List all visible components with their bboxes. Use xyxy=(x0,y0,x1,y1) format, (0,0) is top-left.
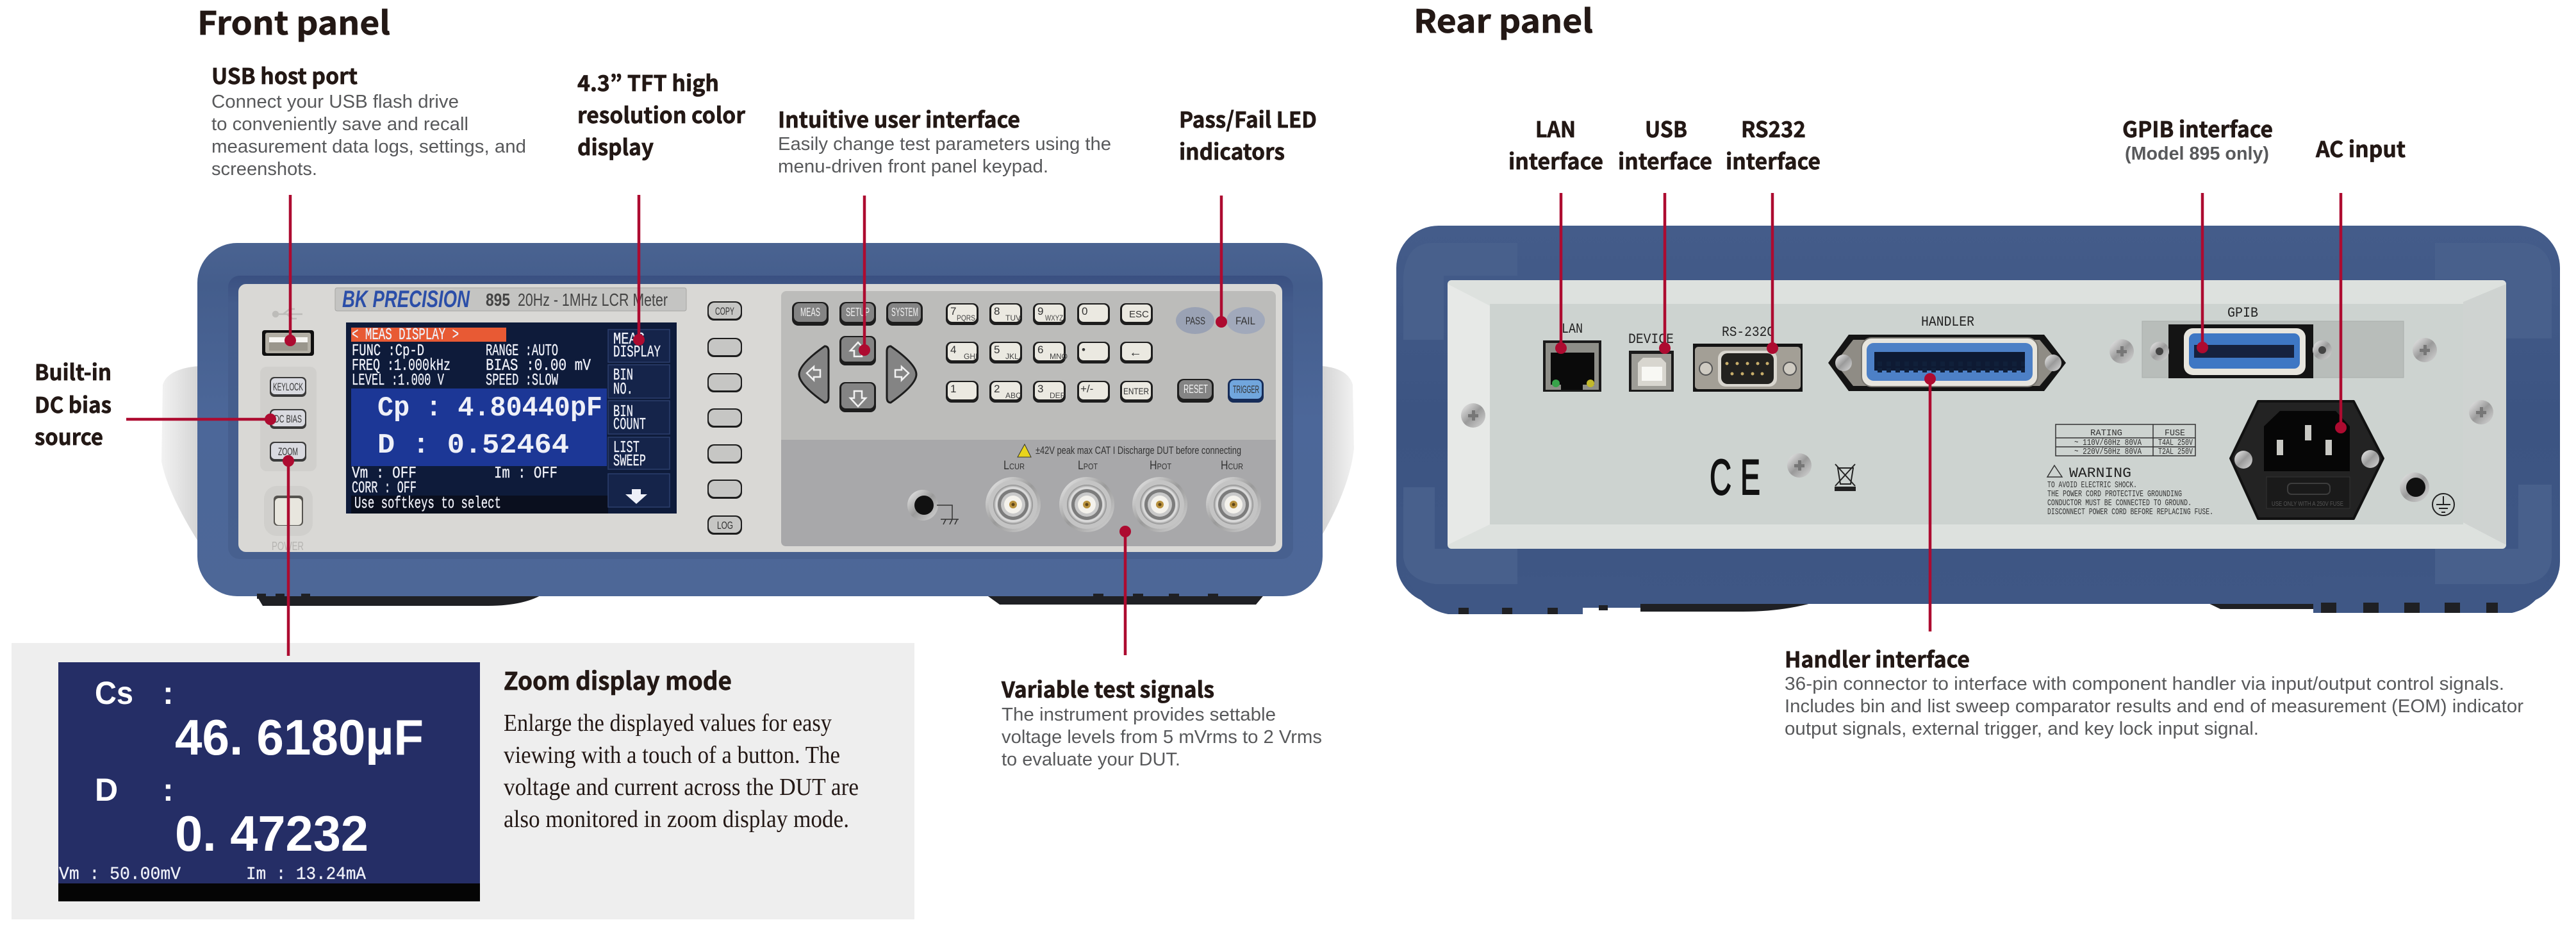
zoom screen: : xyxy=(163,772,174,808)
callout: intuitive user interface: menu-driven front panel keypad. xyxy=(778,156,1048,177)
callout: RS232 interface: interface xyxy=(1726,144,1821,176)
callout: GPIB interface xyxy=(2122,112,2273,164)
callout: Pass/Fail LED indicators: indicators xyxy=(1179,135,1285,166)
LCD screen: Im : OFF xyxy=(494,464,557,483)
KEYLOCK button: KEYLOCK xyxy=(273,381,303,393)
callout: LAN interface xyxy=(1508,112,1603,176)
arrow: LAN xyxy=(1556,193,1566,354)
numeric keys: 0 xyxy=(1082,305,1087,317)
numeric keys: DEF xyxy=(1050,391,1065,400)
numeric keys: 2 xyxy=(994,383,1000,395)
numeric keys: 1 xyxy=(950,383,956,395)
numeric keys: 3 xyxy=(1037,383,1043,395)
ZOOM button: ZOOM xyxy=(278,446,298,458)
LCD screen: Use softkeys to select xyxy=(354,494,501,513)
callout: display xyxy=(577,66,745,162)
RESET key xyxy=(1177,379,1214,403)
zoom heading: Zoom display mode xyxy=(504,662,732,697)
callout: USB interface: USB xyxy=(1645,112,1687,144)
numeric keys: ABC xyxy=(1005,391,1021,400)
bezel xyxy=(1396,226,2560,604)
softkey buttons column xyxy=(707,301,742,535)
zoom screen xyxy=(58,662,480,901)
GPIB connector xyxy=(2142,305,2404,378)
callout: RS232 interface: RS232 xyxy=(1741,112,1806,144)
softkey menu xyxy=(608,330,670,507)
BNC terminals: LPOT xyxy=(1078,459,1098,472)
callout: built-in DC bias source xyxy=(35,355,111,451)
callout: USB host port: to conveniently save and recall xyxy=(211,114,468,135)
feet xyxy=(1640,600,2320,612)
numeric keys: ESC xyxy=(1129,309,1149,320)
callout: AC input: AC input xyxy=(2315,132,2406,163)
rear plate xyxy=(1490,304,2463,524)
TRIGGER key xyxy=(1228,379,1264,403)
lower-right corner skirt with teeth xyxy=(2313,577,2547,613)
callout: intuitive user interface xyxy=(778,103,1111,177)
model nameplate: 895 xyxy=(486,290,510,310)
zoom screen: Vm : 50.00mV xyxy=(59,865,181,885)
safety warning label xyxy=(2047,465,2213,517)
panel: zoom display mode xyxy=(12,643,914,919)
rear inset frame xyxy=(1448,280,2506,549)
callout: variable test signals: Variable test signals xyxy=(1001,673,1214,704)
CE mark: C xyxy=(1710,449,1731,505)
callout: intuitive user interface: Intuitive user interface xyxy=(778,103,1020,134)
softkey menu: BIN xyxy=(613,365,633,385)
callout: handler interface xyxy=(1785,642,2523,739)
AC input socket: USE ONLY WITH A 250V FUSE xyxy=(2272,501,2343,508)
left handle xyxy=(161,366,199,542)
zoom screen: 0. 47232 xyxy=(175,805,368,862)
Pass/Fail LEDs: FAIL xyxy=(1235,315,1255,327)
zoom screen: D xyxy=(95,772,118,808)
numeric keys: 5 xyxy=(994,344,1000,356)
feet xyxy=(255,593,1266,606)
callout: USB host port: screenshots. xyxy=(211,159,317,180)
USB port xyxy=(262,330,314,356)
numeric keys: GHI xyxy=(964,352,977,361)
Pass/Fail LEDs xyxy=(1176,307,1265,334)
bezel xyxy=(197,243,1323,596)
KEYLOCK button xyxy=(270,377,306,397)
menu keys: MEAS xyxy=(800,306,820,319)
zoom description: voltage and current across the DUT are xyxy=(504,774,859,801)
USB device port xyxy=(1628,331,1674,392)
icon: USB symbol xyxy=(273,309,302,319)
numeric keys: JKL xyxy=(1005,352,1019,361)
front panel instrument xyxy=(161,243,1354,606)
LCD screen: FUNC :Cp-D xyxy=(352,341,424,360)
arrow: GPIB xyxy=(2197,193,2208,353)
LCD screen: < MEAS DISPLAY > xyxy=(352,325,459,344)
LCD screen: Vm : OFF xyxy=(352,464,417,483)
numeric keys: • xyxy=(1082,344,1086,356)
corner guards xyxy=(1403,243,2552,584)
arrow: display xyxy=(633,195,645,345)
arrow: variable test signals xyxy=(1120,526,1130,655)
rating table xyxy=(2056,424,2195,457)
BNC terminals: HCUR xyxy=(1221,459,1243,472)
LCD screen: CORR : OFF xyxy=(352,478,417,497)
callout: variable test signals xyxy=(1001,673,1322,770)
arrow: Pass/Fail xyxy=(1216,196,1226,327)
arrow: USB xyxy=(1660,193,1670,354)
zoom description xyxy=(504,710,859,833)
ground jack xyxy=(907,490,959,524)
softkey buttons column: LOG xyxy=(717,519,733,531)
callout: handler interface: 36-pin connector to interface with component handler via input/output control signals. xyxy=(1785,674,2504,694)
rear panel instrument xyxy=(1396,226,2560,614)
callout: USB host port xyxy=(211,59,526,180)
rating table: T2AL 250V xyxy=(2158,447,2193,457)
BNC terminals: LCUR xyxy=(1003,459,1025,472)
HANDLER connector: HANDLER xyxy=(1921,314,1974,330)
softkey buttons column: COPY xyxy=(715,305,734,317)
rating table: RATING xyxy=(2090,428,2122,439)
callout: built-in DC bias source: Built-in xyxy=(35,355,111,387)
safety warning label: TO AVOID ELECTRIC SHOCK. xyxy=(2047,480,2137,490)
callout: Pass/Fail LED indicators xyxy=(1179,103,1317,166)
safety warning label: DISCONNECT POWER CORD BEFORE REPLACING FUSE. xyxy=(2047,507,2213,517)
LCD screen: RANGE :AUTO xyxy=(486,341,558,360)
callout: display: resolution color xyxy=(577,98,745,130)
screws xyxy=(1461,338,2493,478)
menu keys xyxy=(792,302,923,326)
HANDLER connector xyxy=(1828,314,2066,391)
softkey menu: LIST xyxy=(613,438,640,457)
callout: display: display xyxy=(577,130,654,162)
arrow: DC bias xyxy=(126,414,276,424)
CE mark: E xyxy=(1740,449,1760,505)
callout: USB host port: USB host port xyxy=(211,59,358,90)
numeric keys: 9 xyxy=(1037,305,1043,317)
callout: LAN interface: LAN xyxy=(1535,112,1576,144)
callout: LAN interface: interface xyxy=(1508,144,1603,176)
RESET key: RESET xyxy=(1184,383,1208,396)
safety warning label: THE POWER CORD PROTECTIVE GROUNDING xyxy=(2047,489,2182,499)
callout: USB interface: interface xyxy=(1618,144,1712,176)
zoom screen: Cs xyxy=(95,675,133,711)
zoom description: also monitored in zoom display mode. xyxy=(504,806,849,833)
menu keys: SETUP xyxy=(846,306,870,319)
LCD screen: Cp : 4.80440pF xyxy=(377,392,602,424)
callout: handler interface: Includes bin and list sweep comparator results and end of measurement (EOM) indicator xyxy=(1785,696,2523,717)
faceplate xyxy=(238,284,1282,552)
numeric keys: MNO xyxy=(1050,352,1068,361)
icon: WEEE bin xyxy=(1835,464,1855,490)
numeric keys: 8 xyxy=(994,305,1000,317)
numeric keys: ← xyxy=(1129,346,1142,360)
bottom teeth xyxy=(257,594,1218,601)
GPIB connector: GPIB xyxy=(2227,305,2258,321)
callout: display: 4.3” TFT high xyxy=(577,66,719,97)
softkey menu: BIN xyxy=(613,402,633,421)
safety warning label: WARNING xyxy=(2069,465,2131,481)
rating table: FUSE xyxy=(2165,428,2185,439)
LAN port: LAN xyxy=(1562,321,1583,337)
arrow: intuitive user interface xyxy=(859,196,870,355)
callout: handler interface: output signals, external trigger, and key lock input signal. xyxy=(1785,719,2259,739)
numeric keys: 7 xyxy=(950,305,956,317)
USB device port: DEVICE xyxy=(1628,331,1674,347)
ground terminal xyxy=(2400,472,2454,515)
power button: POWER xyxy=(272,540,304,553)
TRIGGER key: TRIGGER xyxy=(1233,383,1259,396)
softkey menu: COUNT xyxy=(613,415,646,434)
zoom description: viewing with a touch of a button. The xyxy=(504,742,840,769)
softkey menu: MEAS xyxy=(613,330,645,349)
arrow keys xyxy=(799,336,916,412)
rating table: ~ 110V/60Hz 80VA xyxy=(2074,438,2142,448)
AC input socket xyxy=(2231,401,2383,519)
BNC terminals: HPOT xyxy=(1150,459,1171,472)
LCD screen: SPEED :SLOW xyxy=(486,371,558,390)
LCD screen: BIAS :0.00 mV xyxy=(486,356,591,375)
model nameplate: BK PRECISION xyxy=(342,286,470,312)
callout: built-in DC bias source: source xyxy=(35,420,103,451)
callout: GPIB interface: (Model 895 only) xyxy=(2125,144,2269,164)
key group xyxy=(260,367,317,471)
lower-left corner skirt with teeth xyxy=(1407,577,1640,614)
callout: variable test signals: voltage levels from 5 mVrms to 2 Vrms xyxy=(1002,727,1322,748)
DC BIAS button: DC BIAS xyxy=(274,413,302,425)
rating table: ~ 220V/50Hz 80VA xyxy=(2074,447,2142,457)
LAN port xyxy=(1543,321,1601,392)
model nameplate: 20Hz - 1MHz LCR Meter xyxy=(518,290,668,310)
arrow: RS232 xyxy=(1767,193,1778,354)
callout: RS232 interface xyxy=(1726,112,1821,176)
right handle xyxy=(1323,366,1354,534)
arrow: AC input xyxy=(2335,193,2347,433)
callout: USB host port: Connect your USB flash drive xyxy=(211,92,459,112)
safety warning label: CONDUCTOR MUST BE CONNECTED TO GROUND. xyxy=(2047,498,2192,508)
softkey menu: NO. xyxy=(613,380,633,399)
callout: variable test signals: to evaluate your DUT. xyxy=(1002,749,1180,770)
warning label: ±42V peak max CAT I Discharge DUT before connecting xyxy=(1036,444,1241,456)
numeric keys: 6 xyxy=(1037,344,1043,356)
LCD screen: LEVEL :1.000 V xyxy=(352,371,444,390)
numeric keys: +/- xyxy=(1080,383,1093,395)
BNC terminals xyxy=(986,459,1261,532)
callout: USB host port: measurement data logs, settings, and xyxy=(211,137,526,157)
arrow: USB host port xyxy=(285,195,296,346)
model nameplate xyxy=(335,286,686,312)
callout: intuitive user interface: Easily change test parameters using the xyxy=(778,134,1111,155)
callout: variable test signals: The instrument provides settable xyxy=(1002,705,1276,725)
ZOOM button xyxy=(270,442,306,462)
zoom screen: : xyxy=(163,675,174,711)
numeric keys xyxy=(946,303,1153,403)
softkey menu: DISPLAY xyxy=(613,342,661,362)
Pass/Fail LEDs: PASS xyxy=(1185,315,1205,327)
RS-232C port: RS-232C xyxy=(1722,324,1774,340)
zoom screen: 46. 6180µF xyxy=(175,709,424,765)
numeric keys: 4 xyxy=(950,344,956,356)
rating table: T4AL 250V xyxy=(2158,438,2193,448)
DC BIAS button xyxy=(270,409,306,429)
LCD screen: FREQ :1.000kHz xyxy=(352,356,450,375)
numeric keys: WXYZ xyxy=(1045,313,1063,322)
RS-232C port xyxy=(1693,324,1803,392)
LCD screen xyxy=(346,322,677,514)
LCD screen: D : 0.52464 xyxy=(377,430,569,462)
callout: built-in DC bias source: DC bias xyxy=(35,388,111,419)
zoom screen: Im : 13.24mA xyxy=(246,865,366,885)
numeric keys: TUV xyxy=(1005,313,1021,322)
arrow: zoom xyxy=(283,455,293,656)
arrow: handler interface xyxy=(1925,373,1935,631)
warning label xyxy=(1018,444,1241,457)
numeric keys: PQRS xyxy=(957,313,975,322)
callout: handler interface: Handler interface xyxy=(1785,642,1970,674)
keypad panel xyxy=(781,291,1276,546)
menu keys: SYSTEM xyxy=(891,306,918,319)
callout: GPIB interface: GPIB interface xyxy=(2122,112,2273,144)
callout: USB interface xyxy=(1618,112,1712,176)
power button xyxy=(264,486,313,553)
callout: Pass/Fail LED indicators: Pass/Fail LED xyxy=(1179,103,1317,134)
softkey menu: SWEEP xyxy=(613,451,646,471)
numeric keys: ENTER xyxy=(1123,386,1149,396)
zoom description: Enlarge the displayed values for easy xyxy=(504,710,832,737)
